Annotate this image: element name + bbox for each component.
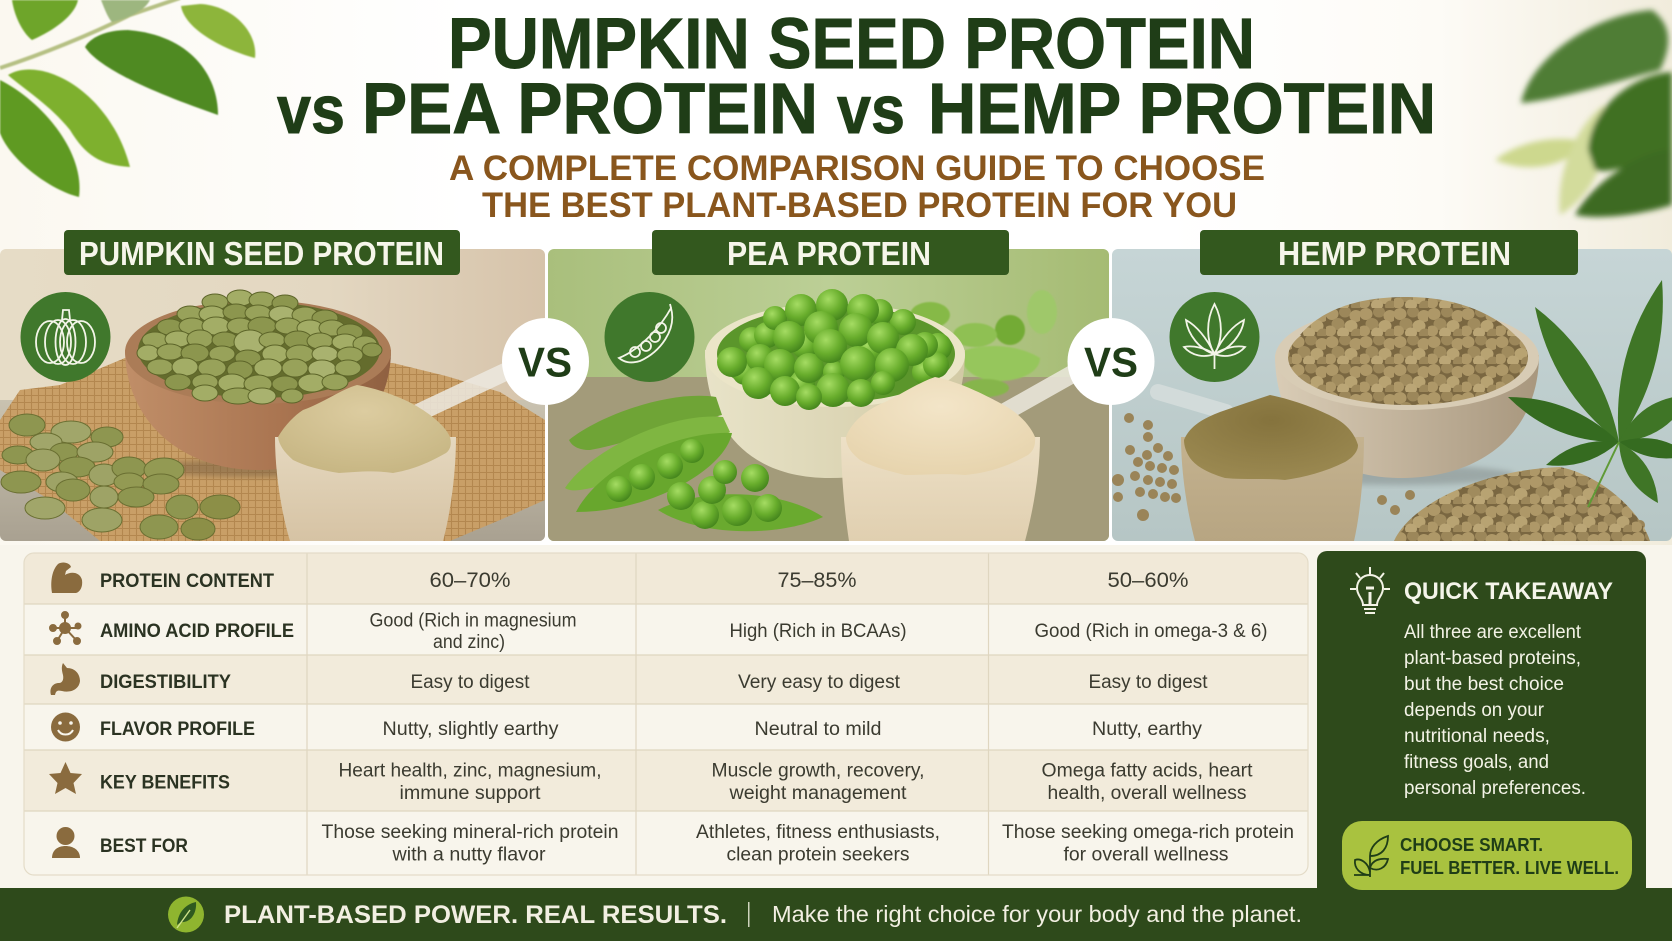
panel: pea photo [548,249,1109,541]
VS badge right [1068,318,1154,405]
takeaway text: plant-based proteins, [1404,648,1581,669]
burlap cloth [0,358,545,541]
row: amino acid profile [50,610,1268,653]
panel: quick takeaway: QUICK TAKEAWAY [1404,578,1613,605]
seeds in bowl [137,290,382,404]
VS badge right: VS [1084,338,1138,386]
row: amino acid profile: Good (Rich in magnesium [370,610,576,632]
takeaway text: fitness goals, and [1404,752,1549,773]
row: key benefits: weight management [728,783,907,804]
row: best for: clean protein seekers [726,844,910,866]
row: flavor profile: Nutty, slightly earthy [382,719,559,740]
row: key benefits: health, overall wellness [1048,783,1246,804]
scoop of hemp powder [1158,392,1364,541]
pumpkin label: PUMPKIN SEED PROTEIN [79,235,444,272]
row: best for: with a nutty flavor [391,844,546,866]
row: amino acid profile: and zinc) [433,632,505,653]
peas in bowl [717,289,952,410]
VS badge left [502,318,589,405]
pea label: PEA PROTEIN [727,235,931,272]
icon: hemp leaf [1170,292,1260,382]
takeaway text: All three are excellent [1404,622,1582,643]
callout: choose smart: CHOOSE SMART. [1400,835,1543,855]
row: protein content [51,563,1188,593]
loose pumpkin seeds [1,414,240,540]
footer band: Make the right choice for your body and the planet. [772,901,1302,927]
title: vs [277,72,345,148]
panel: quick takeaway [1317,551,1646,890]
takeaway text [1404,622,1586,799]
callout: choose smart [1342,821,1632,890]
callout: choose smart: FUEL BETTER. LIVE WELL. [1400,858,1619,878]
row: flavor profile [51,712,1203,742]
row: key benefits [49,760,1253,804]
icon: light bulb [1350,567,1390,613]
icon: pumpkin [20,292,110,382]
icon: smiley [51,712,80,742]
row: digestibility: DIGESTIBILITY [100,672,231,693]
title: PEA PROTEIN [362,70,818,149]
row: best for: Those seeking omega-rich protein [1002,822,1294,843]
scoop of pea powder [841,372,1076,541]
row: best for [52,822,1294,866]
row: protein content: PROTEIN CONTENT [100,571,274,592]
icon: stomach [50,663,80,695]
comparison table [24,553,1308,875]
blurred pods in background [910,290,1057,397]
title: vs [837,72,905,148]
icon: flexed arm [51,563,82,593]
row: protein content: 50–60% [1108,569,1188,592]
row: digestibility: Very easy to digest [738,672,901,693]
row: digestibility: Easy to digest [1088,672,1208,693]
row: protein content: 75–85% [778,569,856,592]
pea label [652,230,1009,275]
VS badge left: VS [518,338,572,386]
icon: person [52,827,80,858]
row: key benefits: Heart health, zinc, magnesium, [338,760,602,782]
icon: sprout [1354,836,1388,877]
row: protein content: 60–70% [430,569,510,592]
hemp label [1200,230,1578,275]
left pods [565,396,823,531]
takeaway text: personal preferences. [1404,778,1586,799]
takeaway text: nutritional needs, [1404,726,1550,747]
row: amino acid profile: High (Rich in BCAAs) [730,621,906,642]
ceramic bowl [705,303,965,478]
subtitle [449,149,1265,225]
title: HEMP PROTEIN [928,70,1436,149]
takeaway text: depends on your [1404,700,1545,721]
hemp seed pile [1394,467,1650,541]
subtitle: THE BEST PLANT-BASED PROTEIN FOR YOU [482,186,1237,225]
row: amino acid profile: Good (Rich in omega-3 & 6) [1034,621,1268,642]
footer band [0,888,1672,941]
row: flavor profile: Neutral to mild [754,719,882,740]
row: best for: BEST FOR [100,836,188,857]
icon: molecule [50,612,80,644]
decorative leaves top right [1495,10,1672,217]
row: digestibility: Easy to digest [410,672,530,693]
icon: star [49,762,82,794]
hemp label: HEMP PROTEIN [1278,235,1511,272]
row: best for: Athletes, fitness enthusiasts, [696,822,940,843]
title: PUMPKIN SEED PROTEIN [448,5,1255,84]
panel: hemp photo [1112,249,1672,541]
row: best for: Those seeking mineral-rich protein [322,822,618,843]
row: best for: for overall wellness [1064,844,1228,866]
icon: pea pod [604,292,694,382]
row: amino acid profile: AMINO ACID PROFILE [100,621,294,642]
seeds scattered left [1112,413,1645,530]
subtitle: A COMPLETE COMPARISON GUIDE TO CHOOSE [449,149,1265,188]
wooden bowl [125,300,391,477]
footer band: PLANT-BASED POWER. REAL RESULTS. [224,901,727,929]
row: digestibility [50,663,1208,695]
row: flavor profile: FLAVOR PROFILE [100,719,255,740]
row: key benefits: immune support [400,783,541,804]
hemp leaf [1508,280,1672,507]
takeaway text: but the best choice [1404,674,1564,695]
row: flavor profile: Nutty, earthy [1092,719,1203,740]
panel: pumpkin seed photo [0,249,545,541]
hemp bowl [1275,297,1539,485]
decorative leaves top left [0,0,255,197]
scoop of pumpkin powder [275,372,505,541]
row: key benefits: KEY BENEFITS [100,772,230,794]
row: key benefits: Omega fatty acids, heart [1042,760,1253,782]
title [277,5,1436,149]
row: key benefits: Muscle growth, recovery, [712,760,924,782]
icon: leaf badge [168,896,204,932]
